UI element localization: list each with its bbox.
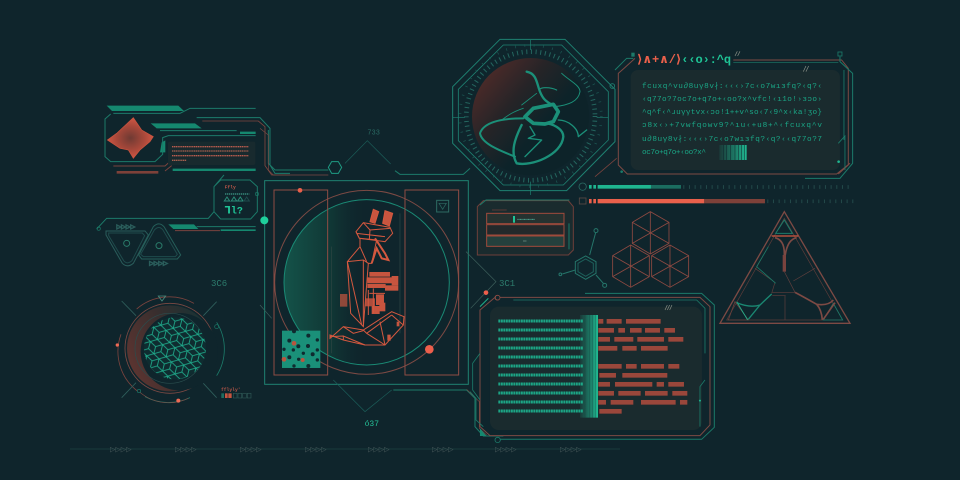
footer arrow strip: ▷▷▷▷	[305, 446, 327, 454]
progress bar: green	[579, 183, 853, 190]
eyepieces	[370, 209, 379, 223]
panel: top-left specimen module	[105, 106, 290, 175]
hex texture swatch	[282, 329, 320, 368]
head	[356, 223, 393, 242]
panel: central microscope viewer	[260, 181, 468, 384]
frame connectors around viewer	[260, 128, 503, 436]
body glyph text: ^q^f‹^ɹuγγtvx‹ɔo!1++v^so‹7‹9^x‹ka!ʒo}	[642, 108, 822, 117]
body glyph text	[642, 82, 822, 157]
microscope illustration	[330, 209, 404, 345]
stage blocks	[340, 272, 398, 314]
panel: form control module	[477, 200, 573, 255]
progress bar: red	[579, 198, 855, 204]
organism tendrils	[480, 72, 587, 164]
icon: molecule	[559, 229, 607, 287]
green viewing disc	[284, 200, 449, 365]
icon: twin triangular glyphs: ▷▷▷▷	[149, 260, 168, 267]
footer arrow strip: ▷▷▷▷	[110, 446, 132, 454]
decoded green rows	[498, 321, 583, 411]
body glyph text: ‹q77o?7oc7o+q7o+‹oo?x^vfc!‹ı1o!›ɜɔo›	[642, 95, 822, 104]
panel: triangular network diagram	[720, 212, 850, 323]
footer arrow strip: ▷▷▷▷	[368, 446, 390, 454]
body glyph text: oc7o+q7o+‹oo?x^	[642, 148, 706, 157]
panel: lattice sphere gauge	[116, 296, 251, 403]
panel: small status readout	[97, 175, 259, 230]
icon: twin triangular glyphs	[106, 223, 256, 267]
caption lines	[168, 142, 255, 165]
frame connectors around viewer: 733	[367, 130, 380, 138]
footer arrow strip: ▷▷▷▷	[432, 446, 454, 454]
label: right tick: 3C1	[499, 279, 515, 289]
icon: twin triangular glyphs: ▷▷▷▷	[117, 223, 135, 230]
panel: octagonal organism scope	[453, 39, 617, 195]
footer arrow strip: ▷▷▷▷	[495, 446, 517, 454]
footer arrow strip: ▷▷▷▷	[560, 446, 582, 454]
panel: small status readout: ᒣl?	[225, 205, 243, 216]
frame connectors around viewer: ó37	[365, 420, 379, 429]
heading: data decoding: ⟩∧+∧/⟩‹‹o›:^q	[637, 53, 731, 67]
base	[330, 312, 404, 345]
icon: hexagonal cube cluster	[613, 212, 689, 287]
infographic canvas	[70, 38, 854, 452]
panel: small status readout: Ffly	[225, 184, 236, 190]
footer arrow strip: ▷▷▷▷	[175, 446, 197, 454]
footer arrow strip: ▷▷▷▷	[240, 446, 262, 454]
body glyph text: u∂8uγ8v∤:‹‹‹›7c‹o7wıɜfq?‹q?‹‹q77o?7	[642, 135, 822, 144]
panel: translation text block	[470, 293, 714, 443]
label: left tick: 3C6	[211, 279, 227, 289]
panel: data decoding text block	[615, 51, 853, 178]
redacted red rows	[598, 319, 687, 414]
panel: lattice sphere gauge: fflyly'	[221, 387, 241, 393]
footer arrow strip	[70, 446, 620, 454]
body glyph text: ɔ8x‹›+7vwfqowv9?^ıu‹+u8+^‹fcuxq^v	[642, 121, 822, 130]
arm and column	[347, 238, 377, 327]
icon: red crystal specimen	[107, 118, 153, 158]
body glyph text: fcuxq^vu∂8uγ8v∤:‹‹‹›7c‹o7wıɜfq?‹q?‹	[642, 82, 822, 91]
